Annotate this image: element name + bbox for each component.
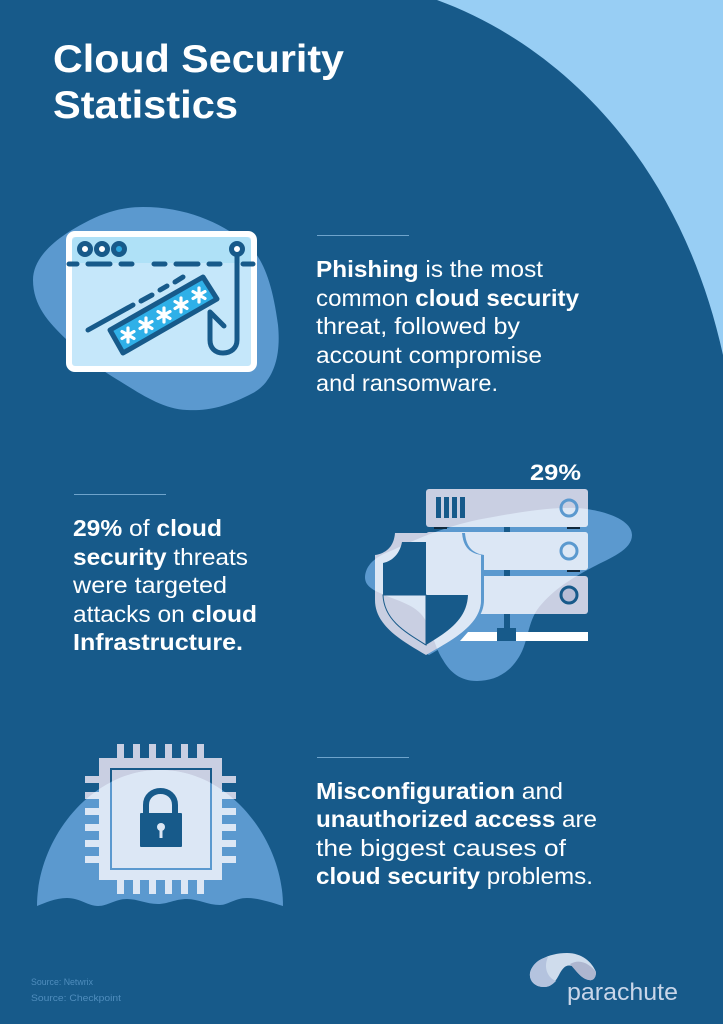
icon: server rack with shield [365,460,632,681]
text: infrastructure statistic: attacks on cloud [73,601,257,627]
icon: microchip with padlock [37,744,283,906]
sources: Source: Netwrix [31,977,93,988]
text: phishing statistic: threat, followed by [316,313,521,339]
divider: infrastructure [74,494,166,495]
text: phishing statistic: Phishing is the most [316,256,544,282]
corner arc: light blue [437,0,723,355]
text: phishing statistic: common cloud security [316,285,579,311]
title: Statistics [53,84,238,127]
text: infrastructure statistic [72,515,257,655]
title [53,38,344,127]
text: infrastructure statistic: Infrastructure. [73,629,243,655]
sources [31,977,121,1004]
text: phishing statistic [316,256,579,396]
text: infrastructure statistic: security threats [73,544,248,570]
text: infrastructure statistic: were targeted [72,572,227,598]
icon: phishing browser window [33,207,279,410]
divider: phishing [317,235,409,236]
logo: Parachute [530,953,678,1006]
divider: misconfiguration [317,757,409,758]
title: Cloud Security [53,38,344,81]
logo: Parachute: parachute [567,979,678,1006]
text: misconfiguration statistic: Misconfiguration and [316,778,563,804]
text: phishing statistic: account compromise [316,342,542,368]
text: infrastructure statistic: 29% of cloud [73,515,222,541]
text: misconfiguration statistic [316,778,597,889]
sources: Source: Checkpoint [31,993,121,1004]
text: misconfiguration statistic: cloud security problems. [316,863,593,889]
label: 29%: 29% [530,460,581,485]
text: phishing statistic: and ransomware. [316,370,498,396]
text: misconfiguration statistic: the biggest causes of [316,835,567,861]
text: misconfiguration statistic: unauthorized access are [316,806,597,832]
